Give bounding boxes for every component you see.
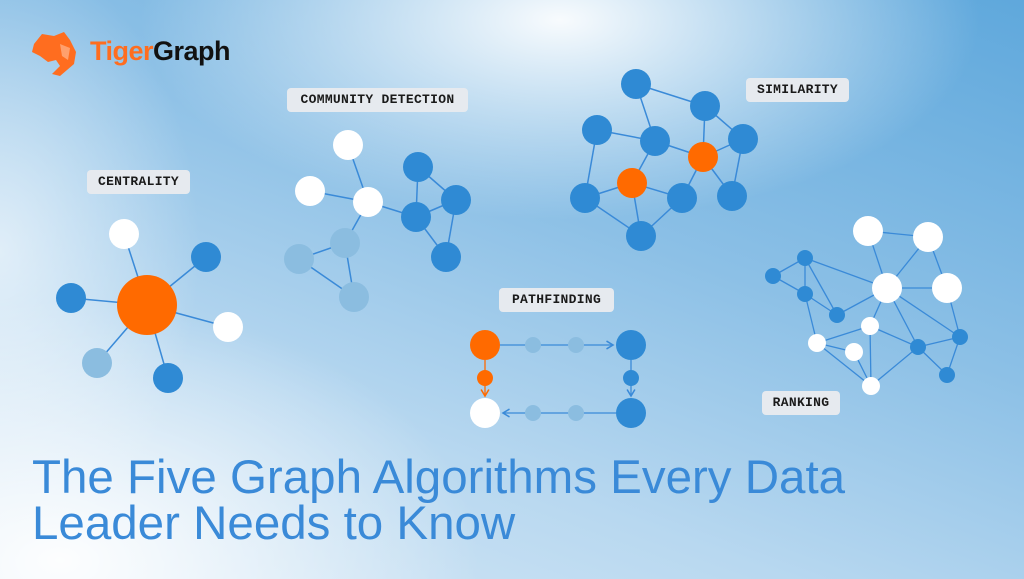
title [32,451,846,550]
logo text: TigerGraph [90,36,230,66]
graph: centrality [56,219,243,393]
graph: community detection [284,130,471,312]
label: pathfinding [499,288,614,312]
graph: ranking [765,216,968,395]
label: similarity [746,78,849,102]
title: The Five Graph Algorithms Every Data [32,451,845,504]
graph: similarity [570,69,758,251]
label: similarity: SIMILARITY [757,82,838,97]
label: ranking: RANKING [773,395,829,410]
label: centrality [87,170,190,194]
graph: pathfinding [470,330,646,428]
label: pathfinding: PATHFINDING [512,292,601,307]
label: community detection [287,88,468,112]
label: centrality: CENTRALITY [98,174,179,189]
label: community detection: COMMUNITY DETECTION [301,92,454,107]
title: Leader Needs to Know [32,497,515,550]
icon: tiger head [32,32,76,76]
logo [32,32,230,76]
label: ranking [762,391,840,415]
